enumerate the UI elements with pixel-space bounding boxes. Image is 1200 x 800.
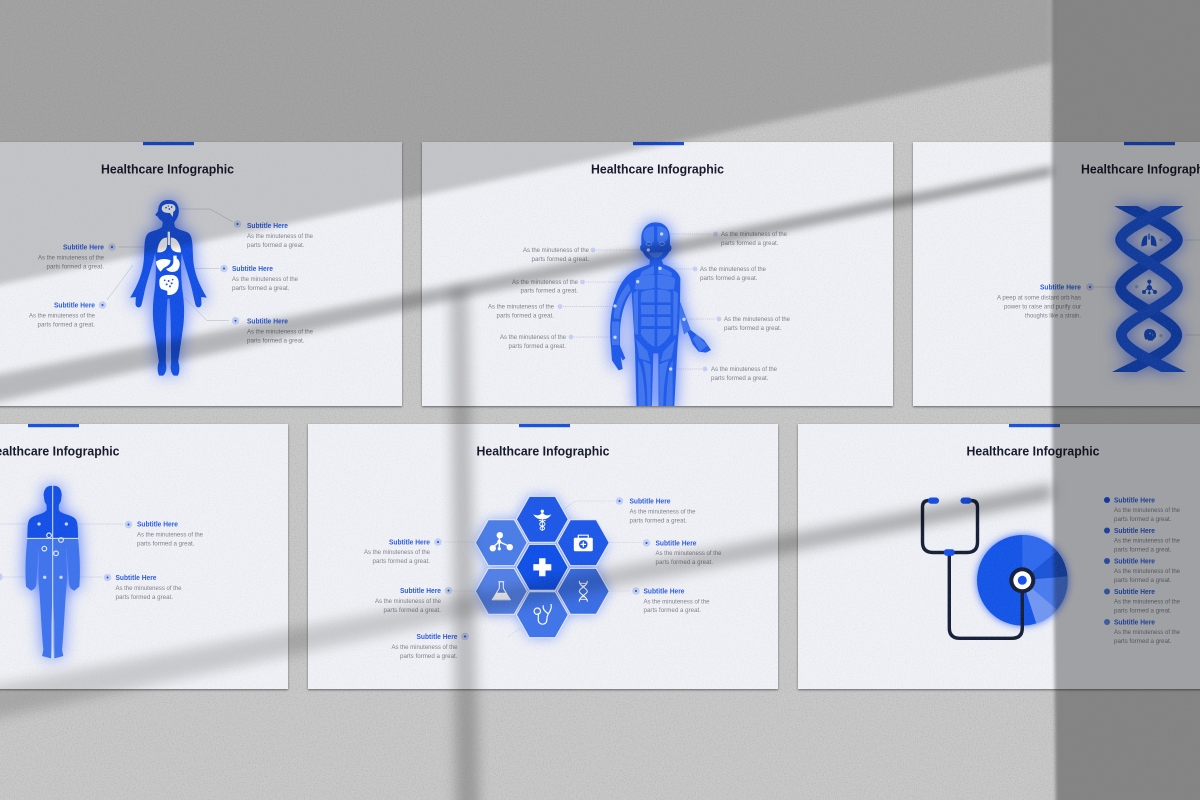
callout: parts formed a great. — [532, 257, 589, 263]
heading: Healthcare Infographic — [591, 162, 724, 176]
list item — [1104, 588, 1181, 615]
callout: As the minuteness of the — [364, 550, 431, 556]
callout: Subtitle Here — [116, 575, 157, 582]
icon: flask — [492, 582, 510, 600]
accent bar — [519, 424, 570, 427]
callout — [713, 232, 788, 247]
callout — [29, 301, 106, 329]
icon: medkit — [574, 535, 593, 551]
icon: stethoscope — [534, 605, 551, 624]
panel: muscles slide — [422, 142, 893, 412]
callout: parts formed a great. — [508, 344, 566, 350]
icon: head — [1144, 329, 1163, 341]
list item: parts formed a great. — [1114, 517, 1172, 523]
pie wedge — [1022, 535, 1057, 580]
icon: lungs — [1141, 234, 1163, 247]
body map markers — [27, 486, 79, 658]
highlight dots — [613, 232, 686, 371]
callout: As the minuteness of the — [488, 304, 555, 310]
accent bar — [1009, 424, 1060, 427]
callout — [38, 243, 116, 270]
callout: As the minuteness of the — [375, 599, 442, 605]
icon: network — [490, 532, 513, 551]
callout — [523, 248, 595, 263]
callout: As the minuteness of the — [721, 232, 788, 238]
hexagon: caduceus — [516, 496, 568, 542]
callout: As the minuteness of the — [392, 645, 458, 651]
panel: stethoscope slide — [798, 424, 1200, 689]
callout: As the minuteness of the — [137, 532, 204, 538]
callout — [220, 265, 299, 292]
list item: As the minuteness of the — [1114, 630, 1181, 636]
callout: parts formed a great. — [700, 276, 758, 282]
callout: Subtitle Here — [630, 498, 671, 506]
callout: Subtitle Here — [54, 302, 95, 310]
callout: Subtitle Here — [416, 634, 458, 641]
list item: Subtitle Here — [1114, 528, 1155, 535]
callout: As the minuteness of the — [724, 317, 791, 323]
callout: As the minuteness of the — [644, 600, 710, 606]
icon: stethoscope — [922, 498, 1035, 638]
icon: network — [1135, 280, 1157, 294]
icon: brain — [162, 204, 175, 217]
hexagon: stethoscope — [516, 592, 568, 638]
pie wedge — [1022, 580, 1057, 623]
accent bar — [28, 424, 79, 427]
callout: parts formed a great. — [38, 323, 95, 329]
panel: hexagon slide — [308, 424, 778, 689]
hexagon: flask — [475, 568, 527, 614]
callout — [234, 220, 314, 249]
accent bar — [633, 142, 684, 145]
callout: As the minuteness of the — [700, 267, 767, 273]
accent bar — [143, 142, 194, 145]
callout: parts formed a great. — [384, 608, 441, 614]
hexagon: cross — [516, 544, 568, 590]
hexagon cluster — [475, 496, 609, 638]
callout: As the minuteness of the — [29, 314, 96, 320]
callout — [616, 497, 696, 524]
pie chart — [977, 535, 1068, 626]
connector lines — [0, 524, 123, 577]
icon: lungs — [157, 232, 181, 252]
callout: parts formed a great. — [232, 286, 290, 292]
callout — [392, 633, 469, 660]
callout: As the minuteness of the — [630, 510, 696, 516]
hexagon: medkit — [557, 520, 609, 566]
callout: parts formed a great. — [372, 559, 430, 565]
connector lines — [1094, 240, 1200, 335]
callout: parts formed a great. — [711, 376, 769, 382]
callout: As the minuteness of the — [247, 329, 314, 335]
heading: Healthcare Infographic — [966, 444, 1100, 458]
callout: power to raise and purify our — [1004, 304, 1081, 310]
accent bar — [1124, 142, 1175, 145]
callout: Subtitle Here — [232, 266, 273, 273]
icon: liver and stomach — [156, 256, 180, 272]
list item: As the minuteness of the — [1114, 508, 1181, 514]
list item: parts formed a great. — [1114, 639, 1172, 645]
callout: As the minuteness of the — [656, 551, 722, 557]
pie wedge — [1022, 576, 1068, 609]
callout — [375, 587, 452, 614]
pie wedge — [1022, 551, 1067, 580]
callout: As the minuteness of the — [523, 248, 590, 254]
callout: Subtitle Here — [247, 318, 288, 325]
callout: As the minuteness of the — [512, 280, 579, 286]
callout — [125, 521, 204, 548]
icon: muscular human figure — [610, 222, 711, 412]
callout: thoughts like a strain. — [1025, 313, 1081, 319]
callout: Subtitle Here — [389, 540, 430, 546]
callout — [703, 367, 778, 382]
list item — [1104, 497, 1181, 523]
heading: Healthcare Infographic — [476, 444, 610, 458]
list item: As the minuteness of the — [1114, 539, 1181, 545]
callout — [488, 304, 562, 320]
callout: As the minuteness of the — [247, 234, 314, 240]
callout — [364, 538, 442, 565]
callout: parts formed a great. — [520, 289, 578, 295]
callout: parts formed a great. — [496, 314, 554, 320]
icon: human silhouette segmented — [25, 486, 80, 658]
list item: As the minuteness of the — [1114, 600, 1181, 606]
list item — [1104, 528, 1181, 554]
callout: parts formed a great. — [247, 338, 305, 344]
callout: As the minuteness of the — [711, 367, 778, 373]
callout: Subtitle Here — [137, 522, 178, 529]
callout: parts formed a great. — [116, 595, 173, 601]
callout: Subtitle Here — [656, 540, 697, 548]
callout: Subtitle Here — [247, 223, 288, 230]
callout — [232, 317, 314, 344]
connector lines — [444, 501, 642, 637]
icon: DNA helix — [1115, 201, 1183, 377]
list item: Subtitle Here — [1114, 498, 1155, 504]
callout: parts formed a great. — [721, 241, 779, 247]
panel: human organs slide — [0, 142, 402, 406]
list item: Subtitle Here — [1114, 589, 1155, 596]
callout — [693, 267, 767, 282]
hexagon glow — [475, 496, 609, 638]
connector lines — [107, 209, 233, 321]
callout: parts formed a great. — [46, 264, 104, 270]
list item — [1104, 619, 1181, 645]
callout: As the minuteness of the — [232, 277, 299, 283]
icon: DNA — [579, 581, 587, 601]
callout — [512, 280, 585, 295]
callout: parts formed a great. — [247, 243, 305, 249]
callout — [717, 317, 791, 332]
hexagon: DNA — [557, 568, 609, 614]
icon: caduceus — [533, 510, 551, 530]
list item: parts formed a great. — [1114, 578, 1172, 584]
list item: parts formed a great. — [1114, 548, 1172, 554]
callout — [632, 587, 710, 614]
list item: Subtitle Here — [1114, 558, 1155, 566]
heading: Healthcare Infographic — [101, 162, 234, 176]
callout: parts formed a great. — [137, 542, 195, 548]
list item — [1104, 558, 1181, 584]
callout: Subtitle Here — [400, 588, 441, 595]
callout: parts formed a great. — [724, 326, 782, 332]
callout — [500, 335, 573, 350]
icon: plus — [533, 558, 551, 576]
icon: intestine — [159, 275, 179, 295]
list item: parts formed a great. — [1114, 609, 1172, 615]
callout — [104, 574, 182, 601]
callout: As the minuteness of the — [500, 335, 567, 341]
hexagon: network — [475, 520, 527, 566]
callout: As the minuteness of the — [116, 586, 182, 592]
connector lines — [563, 234, 716, 369]
icon: human body with organs — [130, 200, 207, 376]
callout: Subtitle Here — [63, 244, 104, 252]
callout: parts formed a great. — [644, 608, 701, 614]
callout: parts formed a great. — [400, 654, 458, 660]
callout: parts formed a great. — [630, 518, 687, 524]
list item: As the minuteness of the — [1114, 569, 1181, 575]
callout: A peep at some distant orb has — [997, 296, 1081, 302]
callout — [643, 539, 722, 566]
callout: Subtitle Here — [1040, 284, 1081, 292]
panel: DNA slide — [913, 142, 1200, 406]
callout: parts formed a great. — [656, 560, 713, 566]
marker: cut-off dot — [0, 573, 3, 581]
list item: Subtitle Here — [1114, 620, 1155, 626]
panel: body map slide — [0, 424, 288, 689]
callout — [997, 283, 1094, 319]
callout: Subtitle Here — [644, 588, 685, 596]
callout: As the minuteness of the — [38, 256, 105, 262]
